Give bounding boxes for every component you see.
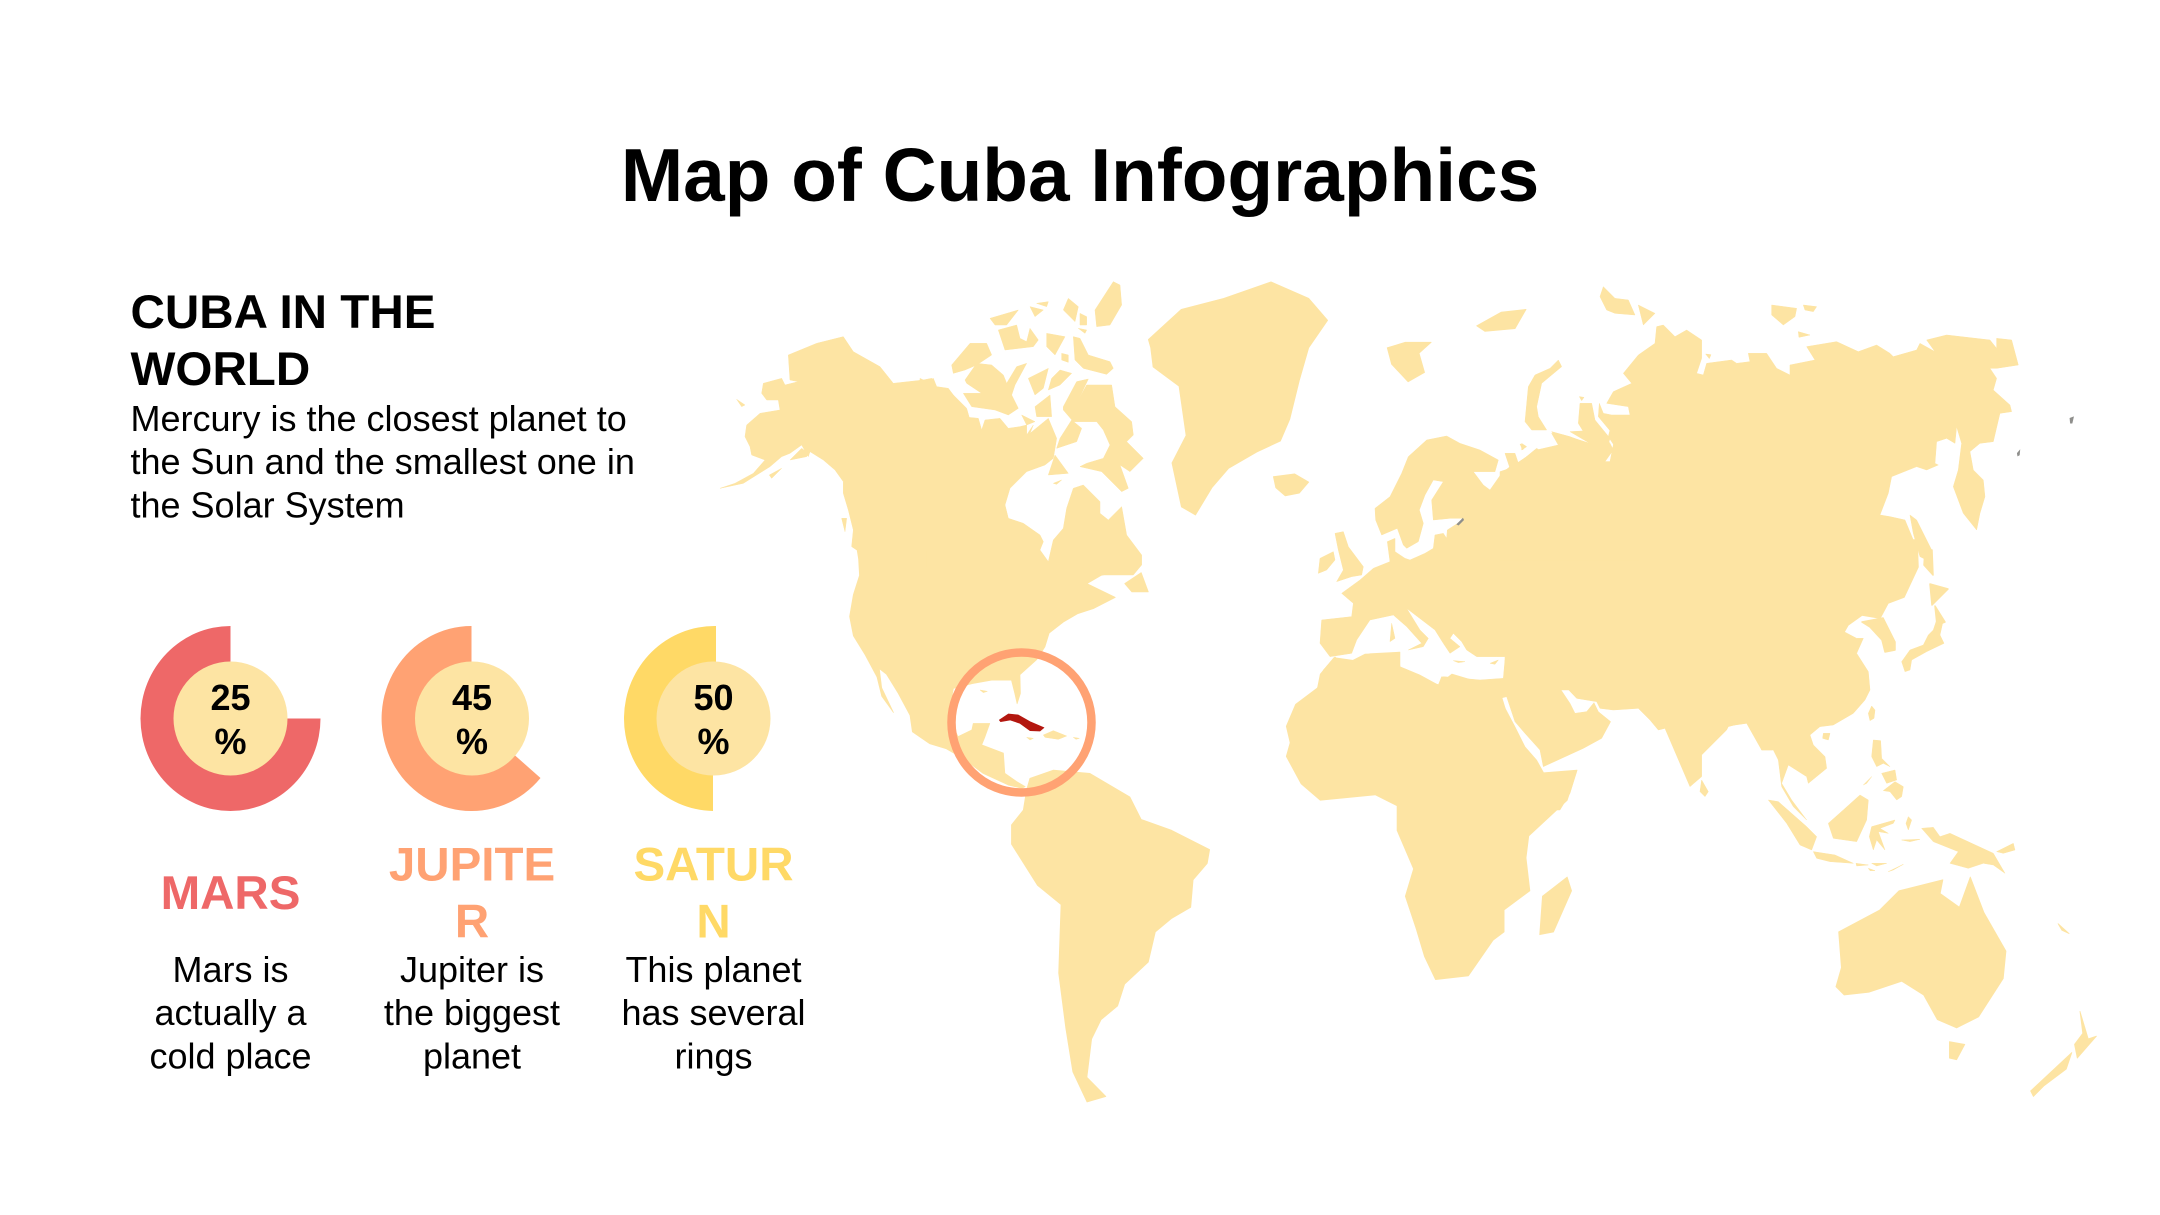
- title: Map of Cuba Infographics: [621, 133, 1539, 217]
- description: Mars: Mars is: [172, 949, 288, 990]
- highlighted country: Cuba: [999, 714, 1044, 731]
- map: Alaska and western Canada: [720, 337, 970, 550]
- description: Saturn: This planet: [625, 949, 802, 990]
- description: Mercury is the closest planet to: [130, 398, 627, 439]
- description: Jupiter: Jupiter is: [400, 949, 544, 990]
- panel: Saturn stat: [621, 626, 806, 1076]
- description: Saturn: has several: [621, 992, 806, 1033]
- heading: WORLD: [130, 343, 310, 396]
- map: grey specks: [1456, 416, 2074, 525]
- donut: Jupiter 45%: 45: [452, 677, 492, 718]
- donut: Saturn 50%: [624, 626, 770, 811]
- donut: Jupiter 45%: %: [456, 721, 488, 762]
- label: Jupiter: JUPITE: [389, 838, 555, 892]
- description: Mars: cold place: [149, 1036, 312, 1076]
- description: the Sun and the smallest one in: [130, 441, 635, 482]
- text block: Cuba in the world: [130, 286, 635, 526]
- label: Jupiter: R: [455, 896, 489, 948]
- donut: Mars 25%: %: [214, 721, 247, 762]
- map: Europe and Mediterranean: [1317, 430, 1650, 690]
- map: South-East Asia and Indonesia: [1720, 620, 2015, 873]
- label: Saturn: N: [696, 896, 731, 948]
- map: Africa, Australia and remaining islands: [1286, 309, 2096, 1096]
- heading: CUBA IN THE: [130, 286, 435, 339]
- donut: Saturn 50%: 50: [693, 677, 734, 718]
- map: lower North and South America, Greenland, Iceland: [850, 282, 1328, 1102]
- callout ring around Cuba: [952, 652, 1092, 792]
- world map: [720, 282, 2096, 1102]
- donut: Mars 25%: [141, 626, 320, 811]
- map: Caribbean islands: [980, 690, 1079, 740]
- label: Saturn: SATUR: [633, 838, 794, 892]
- donut: Saturn 50%: %: [697, 721, 730, 762]
- description: Jupiter: the biggest: [384, 992, 560, 1033]
- label: Mars: MARS: [161, 867, 300, 920]
- panel: Mars stat: [141, 626, 320, 1076]
- donut: Jupiter 45%: [382, 626, 540, 811]
- description: Jupiter: planet: [423, 1036, 521, 1076]
- donut: Mars 25%: 25: [210, 677, 251, 718]
- map: Canadian Arctic and Hudson Bay: [920, 282, 1143, 575]
- panel: Jupiter stat: [382, 626, 560, 1076]
- description: Saturn: rings: [674, 1036, 753, 1076]
- map: northern Russia: [1500, 287, 2018, 560]
- map: Central and East Asia interior, Korea, northern Japan, Sakhalin: [1640, 540, 1948, 680]
- description: the Solar System: [130, 484, 405, 526]
- map: Middle East, India and North-East Africa: [1400, 660, 1780, 810]
- description: Mars: actually a: [154, 992, 308, 1033]
